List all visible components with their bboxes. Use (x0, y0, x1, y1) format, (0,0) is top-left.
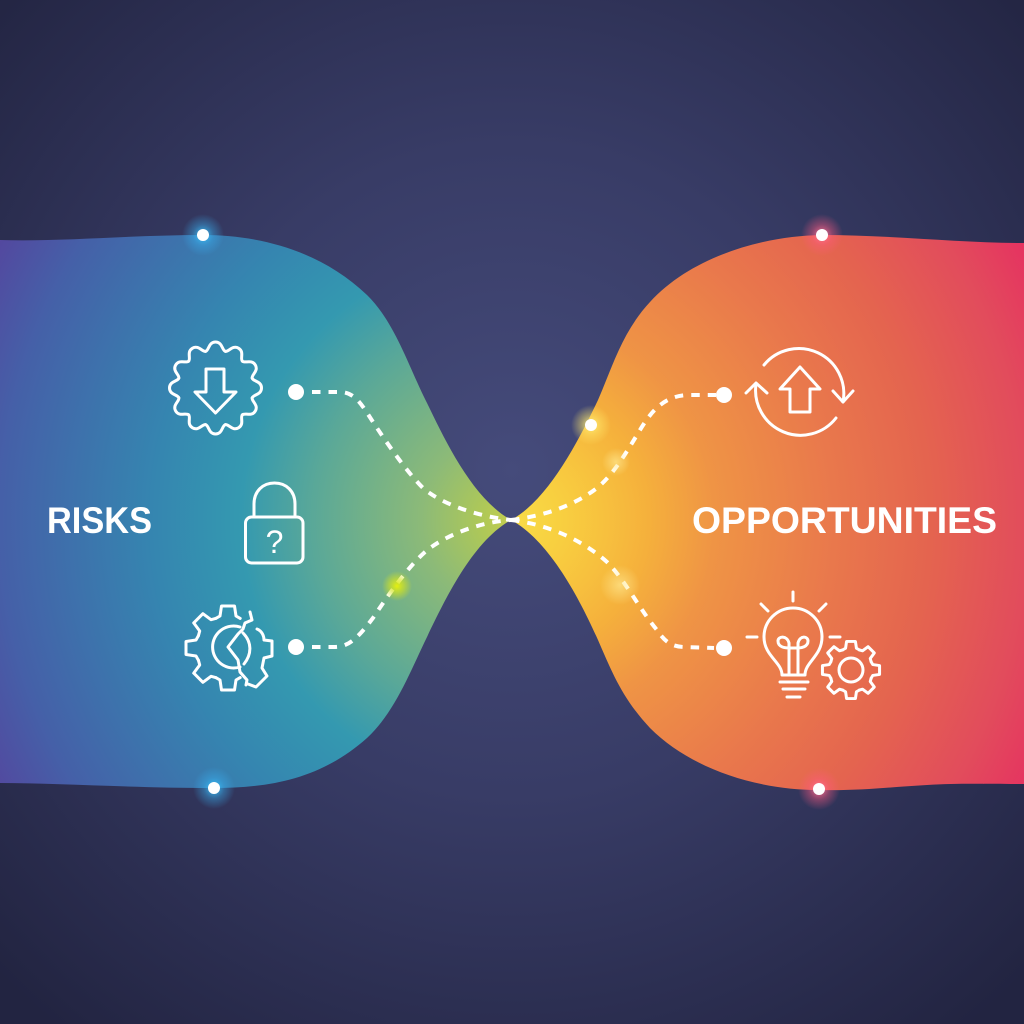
node: opportunities lower dot (716, 640, 732, 656)
glow: lime on dashed line (382, 571, 412, 601)
icon: broken gear (186, 606, 272, 690)
node: risks lower dot (288, 639, 304, 655)
icon: padlock with question mark (246, 483, 303, 563)
glow: bottom left blue (193, 767, 235, 809)
heading: risks: RISKS (47, 500, 152, 541)
icon: light bulb with gear (747, 592, 880, 699)
panel: risks band (0, 235, 511, 788)
glow: faint lower right (600, 565, 640, 605)
glow: top right pink (801, 214, 843, 256)
panel: opportunities band (511, 235, 1024, 790)
glow: top left blue (182, 214, 224, 256)
glow: bottom right pink (798, 768, 840, 810)
icon: gear with down arrow (170, 342, 262, 434)
connector: risks lower dashed line (312, 520, 511, 647)
connector: opportunities upper dashed line (511, 395, 716, 520)
glow: faint upper right (602, 448, 630, 476)
node: risks upper dot (288, 384, 304, 400)
icon: cycle arrows with up arrow (746, 349, 853, 435)
node: opportunities upper dot (716, 387, 732, 403)
glow: yellow waist dot (571, 405, 611, 445)
connector: risks upper dashed line (312, 392, 511, 520)
connector: opportunities lower dashed line (511, 520, 714, 648)
heading: opportunities: OPPORTUNITIES (692, 500, 997, 541)
icon: padlock with question mark: ? (266, 524, 283, 560)
